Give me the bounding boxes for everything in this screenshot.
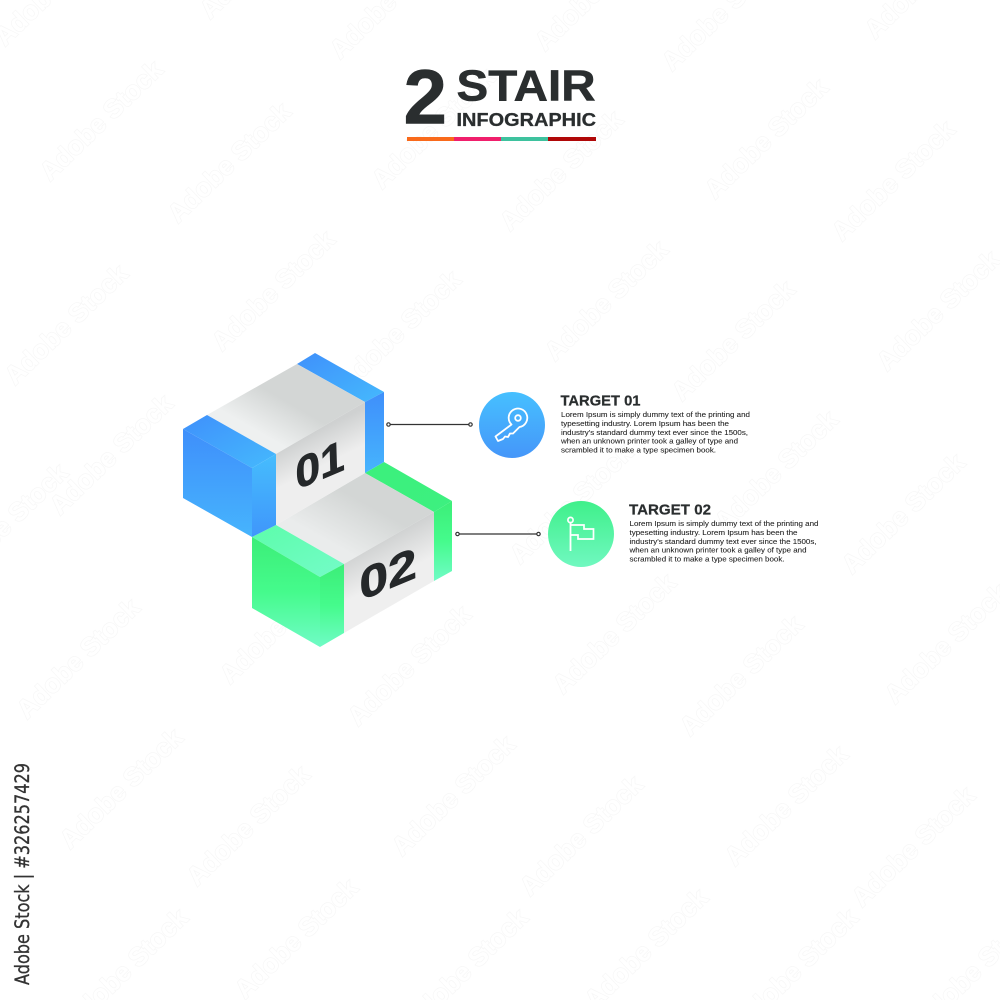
watermark pattern: Adobe Stock [718,739,854,871]
watermark pattern: Adobe Stock [365,62,501,194]
title word: infographic: INFOGRAPHIC [456,110,596,130]
title numeral: 2 [404,55,447,141]
connector: target 02 [456,532,540,536]
icon: flag in green circle [548,501,614,567]
watermark pattern: Adobe Stock [665,274,801,406]
watermark pattern: Adobe Stock [503,437,639,569]
body: target 01: scrambled it to make a type specimen book. [561,445,716,454]
heading: target 01: TARGET 01 [560,392,640,410]
watermark pattern: Adobe Stock [205,224,341,356]
watermark pattern: Adobe Stock [341,599,477,731]
watermark pattern: Adobe Stock [43,388,179,520]
body: target 01: industry's standard dummy text ever since the 1500s, [561,428,748,437]
watermark pattern: Adobe Stock [845,780,981,912]
heading: target 02: TARGET 02 [629,502,711,518]
body: target 01: typesetting industry. Lorem Ipsum has been the [561,419,729,428]
watermark pattern: Adobe Stock [708,404,844,536]
body: target 01: when an unknown printer took a galley of type and [560,437,738,446]
watermark pattern: Adobe Stock [53,722,189,854]
icon: key in blue circle [479,392,545,458]
watermark pattern: Adobe Stock [0,258,134,390]
body: target 02: industry's standard dummy text ever since the 1500s, [630,537,816,546]
watermark pattern: Adobe Stock [180,759,316,891]
body: target 01 [560,410,750,454]
body: target 02: scrambled it to make a type specimen book. [630,554,784,563]
body: target 02 [628,519,818,563]
watermark pattern: Adobe Stock [835,447,971,579]
text block: target 01 [560,392,750,454]
text block: target 02 [628,502,818,563]
stock id caption: Adobe Stock | #326257429 [11,763,34,985]
body: target 01: Lorem Ipsum is simply dummy text of the printing and [561,410,750,419]
step number 01: 01 [295,429,345,500]
watermark pattern: Adobe Stock [213,557,349,689]
watermark pattern: Adobe Stock [673,609,809,741]
watermark pattern: Adobe Stock [385,729,521,861]
colour bar [407,137,596,141]
step 01 block [183,353,384,537]
title word: stair: STAIR [456,62,596,110]
step 02 block [252,462,452,647]
step number 02: 02 [359,537,417,611]
watermark pattern: Adobe Stock [161,96,297,228]
title [404,55,596,141]
isometric stair chart [183,353,452,647]
watermark pattern: Adobe Stock [546,567,682,699]
watermark pattern: Adobe Stock [538,234,674,366]
watermark pattern: Adobe Stock [825,114,961,246]
connector: target 01 [387,423,472,426]
watermark pattern: Adobe Stock [10,592,146,724]
watermark pattern: Adobe Stock [513,769,649,901]
body: target 02: typesetting industry. Lorem Ipsum has been the [630,528,798,537]
body: target 02: Lorem Ipsum is simply dummy text of the printing and [630,519,818,528]
body: target 02: when an unknown printer took a galley of type and [628,546,806,555]
watermark pattern: Adobe Stock [698,72,834,204]
watermark pattern: Adobe Stock [331,264,467,396]
watermark pattern: Adobe Stock [33,54,169,186]
watermark pattern: Adobe Stock [493,104,629,236]
